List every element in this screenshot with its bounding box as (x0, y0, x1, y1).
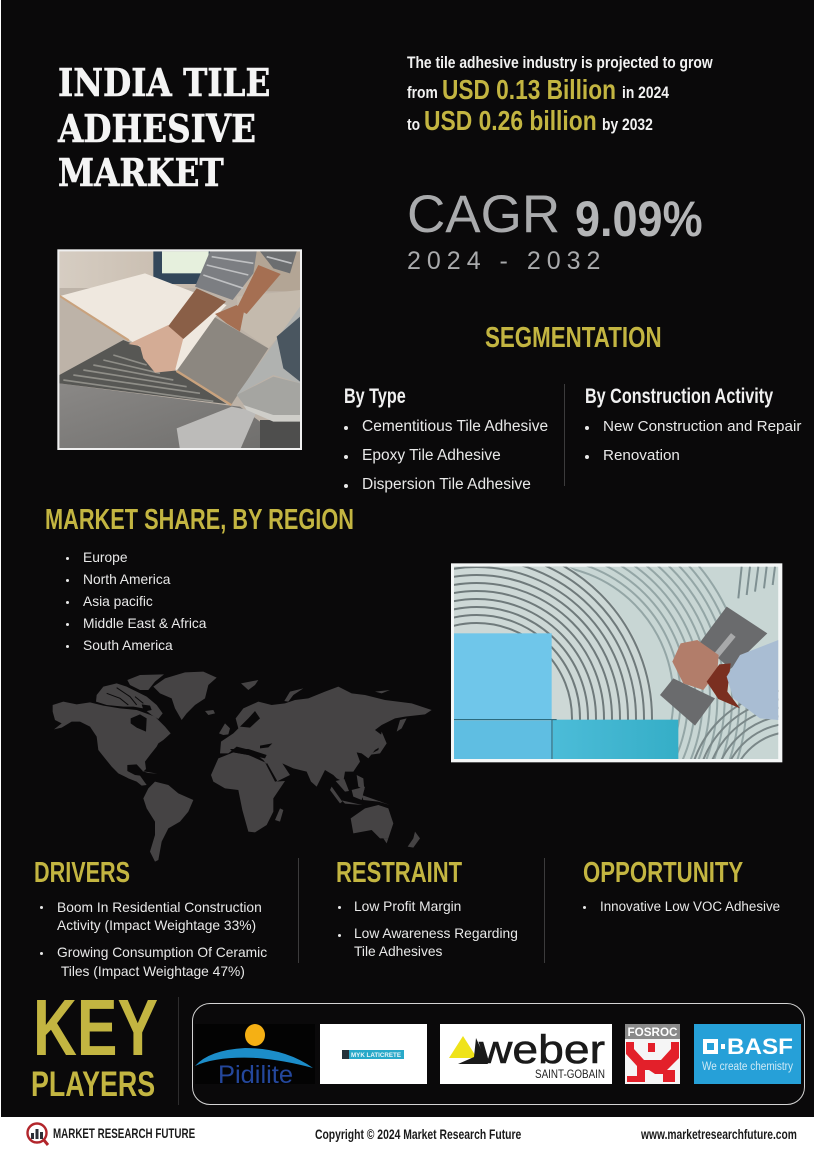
region list: Europe (83, 550, 128, 565)
segmentation heading: SEGMENTATION (485, 322, 662, 354)
west hemisphere (53, 672, 217, 862)
CAGR: CAGR (407, 185, 560, 244)
title: ADHESIVE (58, 106, 256, 151)
segment list: by construction activity: Renovation (603, 447, 680, 464)
CAGR (407, 185, 703, 247)
by construction heading: By Construction Activity (585, 385, 773, 408)
logo: BASF (694, 1024, 801, 1084)
CAGR period: 2024 - 2032 (407, 247, 606, 275)
CAGR: 9.09% (575, 191, 703, 247)
drivers heading: DRIVERS (34, 857, 130, 889)
restraint panel (336, 857, 518, 959)
drivers panel: Tiles (Impact Weightage 47%) (61, 964, 245, 979)
drivers panel (34, 857, 267, 979)
opportunity panel (583, 857, 780, 914)
footer logo icon (26, 1122, 49, 1146)
region list (66, 550, 206, 653)
logo: Fosroc (625, 1024, 680, 1084)
restraint panel: Low Awareness Regarding (354, 926, 518, 941)
market size text (407, 53, 713, 136)
region list: South America (83, 638, 173, 653)
copyright: Copyright © 2024 Market Research Future (315, 1126, 521, 1142)
market size text: by 2032 (602, 115, 653, 134)
market size text: to (407, 115, 420, 134)
eastern hemisphere (211, 680, 432, 848)
segment list: by type (344, 385, 548, 493)
drivers panel: Growing Consumption Of Ceramic (57, 945, 267, 960)
photo: laying floor tile (57, 249, 302, 450)
segment list: by type: Cementitious Tile Adhesive (362, 418, 548, 435)
title: MARKET (58, 150, 224, 195)
big fan (454, 566, 575, 607)
drivers panel: Activity (Impact Weightage 33%) (57, 918, 256, 933)
opportunity heading: OPPORTUNITY (583, 857, 743, 889)
key players logo panel (192, 1003, 805, 1105)
market size text: in 2024 (622, 83, 669, 102)
region list: North America (83, 572, 170, 587)
segment list: by type: Epoxy Tile Adhesive (362, 447, 501, 464)
segment list: by construction activity (585, 385, 802, 464)
by type heading: By Type (344, 385, 406, 408)
market size text: from (407, 83, 438, 102)
logo: Myk Laticrete: MYK LATICRETE (351, 1053, 401, 1059)
segment list: by type: Dispersion Tile Adhesive (362, 476, 531, 493)
restraint panel: Tile Adhesives (354, 944, 442, 959)
restraint panel: Low Profit Margin (354, 899, 461, 914)
world map (52, 672, 432, 862)
logo: Weber Saint-Gobain (440, 1024, 612, 1084)
players word: PLAYERS (31, 1065, 155, 1104)
market size text: USD 0.13 Billion (442, 74, 616, 105)
market size text: The tile adhesive industry is projected to grow (407, 53, 713, 72)
logo: Myk Laticrete (320, 1024, 427, 1084)
footer brand name: MARKET RESEARCH FUTURE (53, 1125, 195, 1141)
logo: Pidilite (195, 1024, 313, 1084)
key word: KEY (33, 983, 158, 1072)
corner arcs (402, 517, 491, 606)
title (57, 60, 270, 195)
hudson bay (131, 714, 147, 732)
drivers panel: Boom In Residential Construction (57, 900, 262, 915)
market size text: USD 0.26 billion (424, 105, 597, 136)
footer (26, 1122, 797, 1146)
title: INDIA TILE (58, 60, 270, 105)
logo: Weber Saint-Gobain: weber (478, 1028, 605, 1072)
region list: Middle East & Africa (83, 616, 206, 631)
restraint heading: RESTRAINT (336, 857, 462, 889)
market share heading: MARKET SHARE, BY REGION (45, 504, 354, 536)
logo: Fosroc: FOSROC (628, 1025, 678, 1039)
region list: Asia pacific (83, 594, 153, 609)
inland seas (240, 711, 260, 728)
photo: trowel and blue tiles (451, 563, 782, 762)
stripes upper right (456, 566, 748, 759)
logo: BASF: BASF (727, 1034, 793, 1059)
opportunity panel: Innovative Low VOC Adhesive (600, 899, 780, 914)
website: www.marketresearchfuture.com (641, 1126, 797, 1142)
key players heading (31, 983, 158, 1104)
segment list: by construction activity: New Construction and Repair (603, 418, 801, 435)
